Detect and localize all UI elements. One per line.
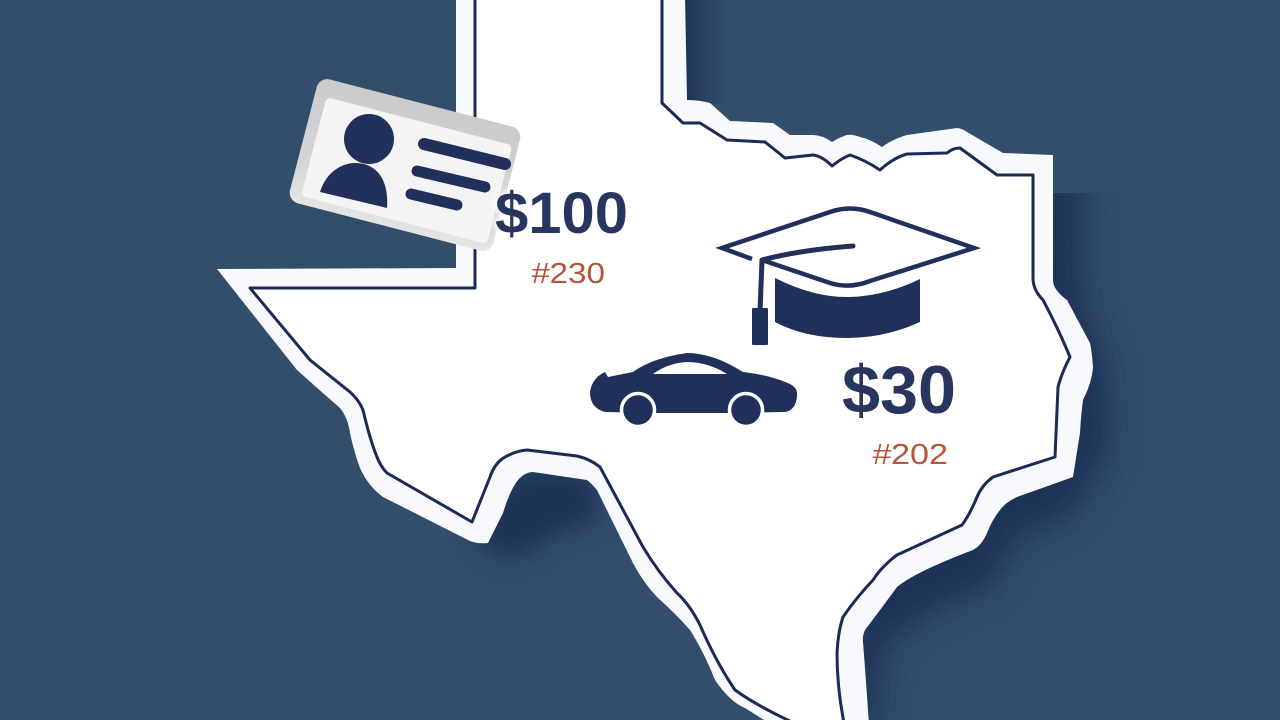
cap base xyxy=(775,278,920,338)
car front wheel xyxy=(730,394,762,426)
icon: car xyxy=(590,353,797,426)
icon: graduation cap xyxy=(722,208,974,345)
sub-label: 230: #230 xyxy=(531,258,605,290)
car rear wheel xyxy=(622,394,654,426)
car body xyxy=(590,353,797,413)
id card body xyxy=(287,77,523,253)
icon: id card xyxy=(287,77,523,253)
cap tassel xyxy=(752,308,768,345)
texas map: outer white border xyxy=(217,0,1093,720)
cap board outline xyxy=(722,208,974,286)
texas map: inner panel with navy outline xyxy=(250,0,1070,720)
price: $30: $30 xyxy=(842,352,956,428)
id card text lines xyxy=(411,144,505,205)
id card portrait xyxy=(320,114,394,208)
car window xyxy=(653,362,727,374)
cap tassel string xyxy=(760,246,853,312)
price: $100: $100 xyxy=(495,181,628,246)
price: $100: $100 xyxy=(495,181,628,246)
drop shadows behind the map xyxy=(470,0,1112,720)
infographic canvas xyxy=(217,0,1120,720)
sub-label: 202: #202 xyxy=(872,439,948,471)
